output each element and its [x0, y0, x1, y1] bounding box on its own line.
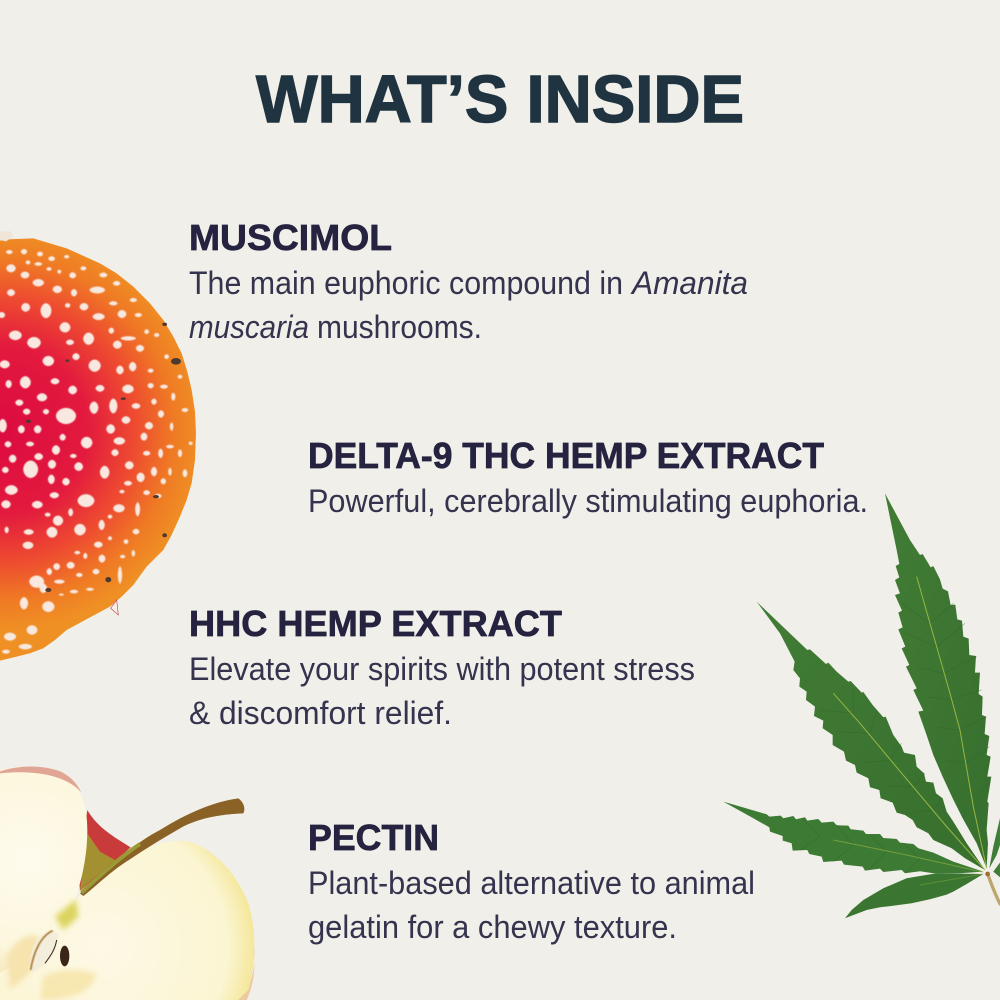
description: muscimol: The main euphoric compound in	[189, 265, 623, 301]
heading: delta-9: DELTA-9 THC HEMP EXTRACT	[308, 435, 824, 476]
heading: pectin: PECTIN	[308, 817, 439, 858]
mushroom torn edge	[111, 600, 118, 615]
image: hemp leaf	[723, 493, 1000, 918]
mushroom spots	[0, 248, 193, 654]
image: apple half	[0, 767, 255, 1000]
image: amanita mushroom cap	[0, 231, 196, 661]
description: hhc: & discomfort relief.	[189, 695, 452, 731]
description: pectin: Plant-based alternative to animal	[308, 865, 755, 901]
text block: delta-9	[308, 435, 868, 519]
leaflet: right edge	[989, 818, 1000, 877]
heading: muscimol: MUSCIMOL	[189, 217, 392, 258]
description: muscimol: Amanita	[630, 265, 748, 301]
mushroom specks	[26, 323, 181, 592]
leaf side veins	[800, 603, 989, 872]
description: hhc: Elevate your spirits with potent stress	[189, 651, 695, 687]
description: muscimol	[189, 265, 748, 345]
apple skin in cavity	[79, 810, 131, 891]
description: pectin: gelatin for a chewy texture.	[308, 909, 677, 945]
apple core	[7, 899, 97, 1000]
apple left flesh	[0, 767, 87, 973]
heading: hhc: HHC HEMP EXTRACT	[189, 603, 562, 644]
description: pectin	[308, 865, 755, 945]
description: delta-9: Powerful, cerebrally stimulating euphoria.	[308, 483, 868, 519]
text block: hhc	[189, 603, 695, 731]
description: muscimol: mushrooms.	[317, 309, 482, 345]
leaflet: bottom	[845, 873, 983, 918]
apple right flesh	[0, 841, 254, 1000]
text block: muscimol	[189, 217, 748, 345]
apple stem	[80, 798, 244, 896]
leaf stem	[988, 874, 1000, 905]
apple rim	[0, 767, 81, 793]
description: muscimol: muscaria	[189, 309, 309, 345]
leaflet: lower left	[723, 802, 983, 873]
description: hhc	[189, 651, 695, 731]
leaflet: top	[885, 493, 991, 868]
title: WHAT’S INSIDE	[256, 62, 744, 137]
leaf node	[985, 872, 990, 876]
leaflet: middle	[757, 602, 985, 870]
leaf veins	[833, 577, 987, 885]
text block: pectin	[308, 817, 755, 945]
